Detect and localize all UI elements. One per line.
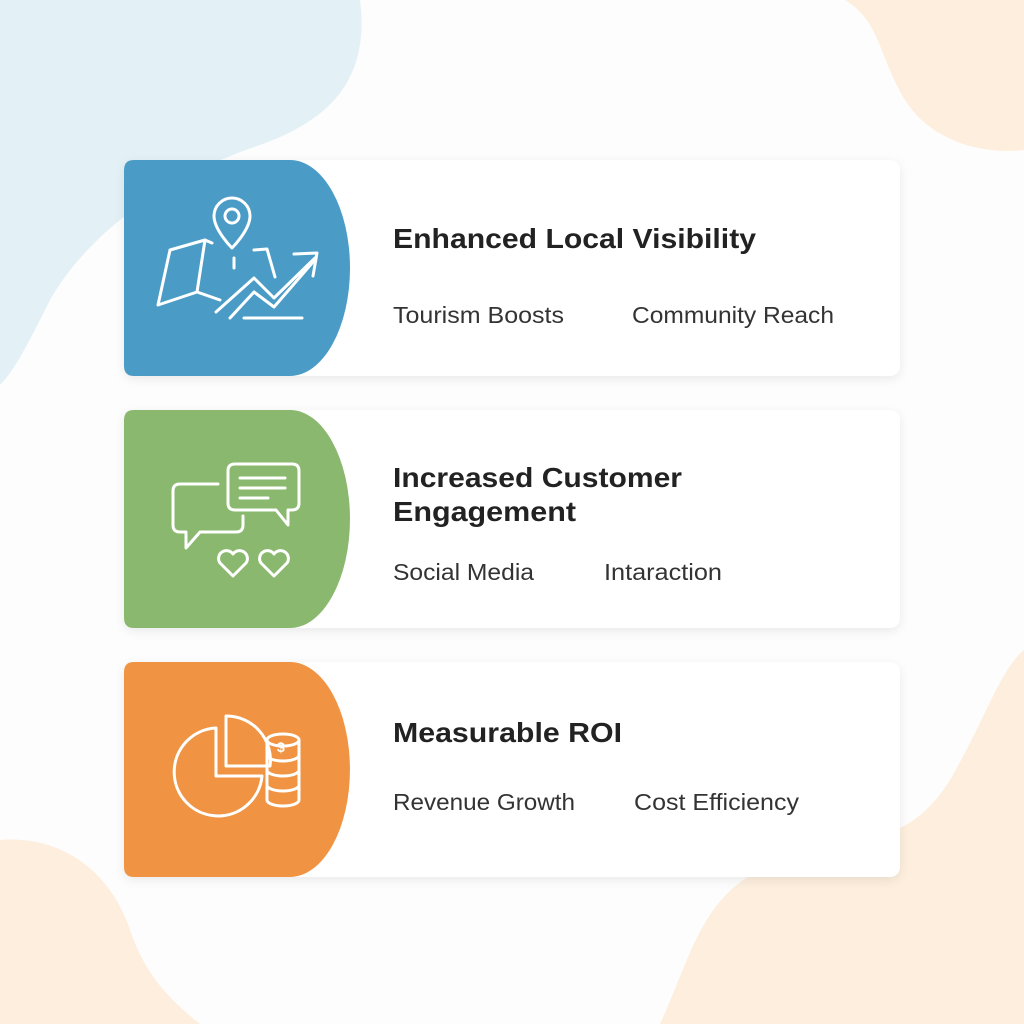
card 1: Enhanced Local Visibility (124, 160, 900, 376)
title: Measurable ROI (393, 717, 622, 748)
card 3: Measurable ROI: $ (277, 739, 285, 755)
background blob: blue top-left (0, 0, 362, 385)
sub-items: Revenue Growth (393, 789, 575, 815)
card 3: Measurable ROI (124, 662, 900, 877)
card 2: Increased Customer Engagement: Intaraction (604, 559, 722, 585)
card 3: Measurable ROI: Cost Efficiency (634, 789, 800, 815)
card 2: Increased Customer Engagement: Engagement (393, 496, 576, 527)
background blob: peach top-right (845, 0, 1024, 151)
card 2: Increased Customer Engagement (124, 410, 900, 628)
card 1: Enhanced Local Visibility: Community Reach (632, 302, 834, 328)
sub-items: Social Media (393, 559, 534, 585)
title: Enhanced Local Visibility (393, 223, 756, 254)
icon: map with pin and trend arrow (158, 198, 317, 318)
icon: chat bubbles and hearts (173, 464, 299, 576)
icon: pie chart and coins (174, 716, 299, 816)
background blob: peach bottom-right (660, 650, 1024, 1024)
title: Increased Customer (393, 462, 682, 493)
background blob: peach bottom-left (0, 840, 200, 1024)
sub-items: Tourism Boosts (393, 302, 564, 328)
